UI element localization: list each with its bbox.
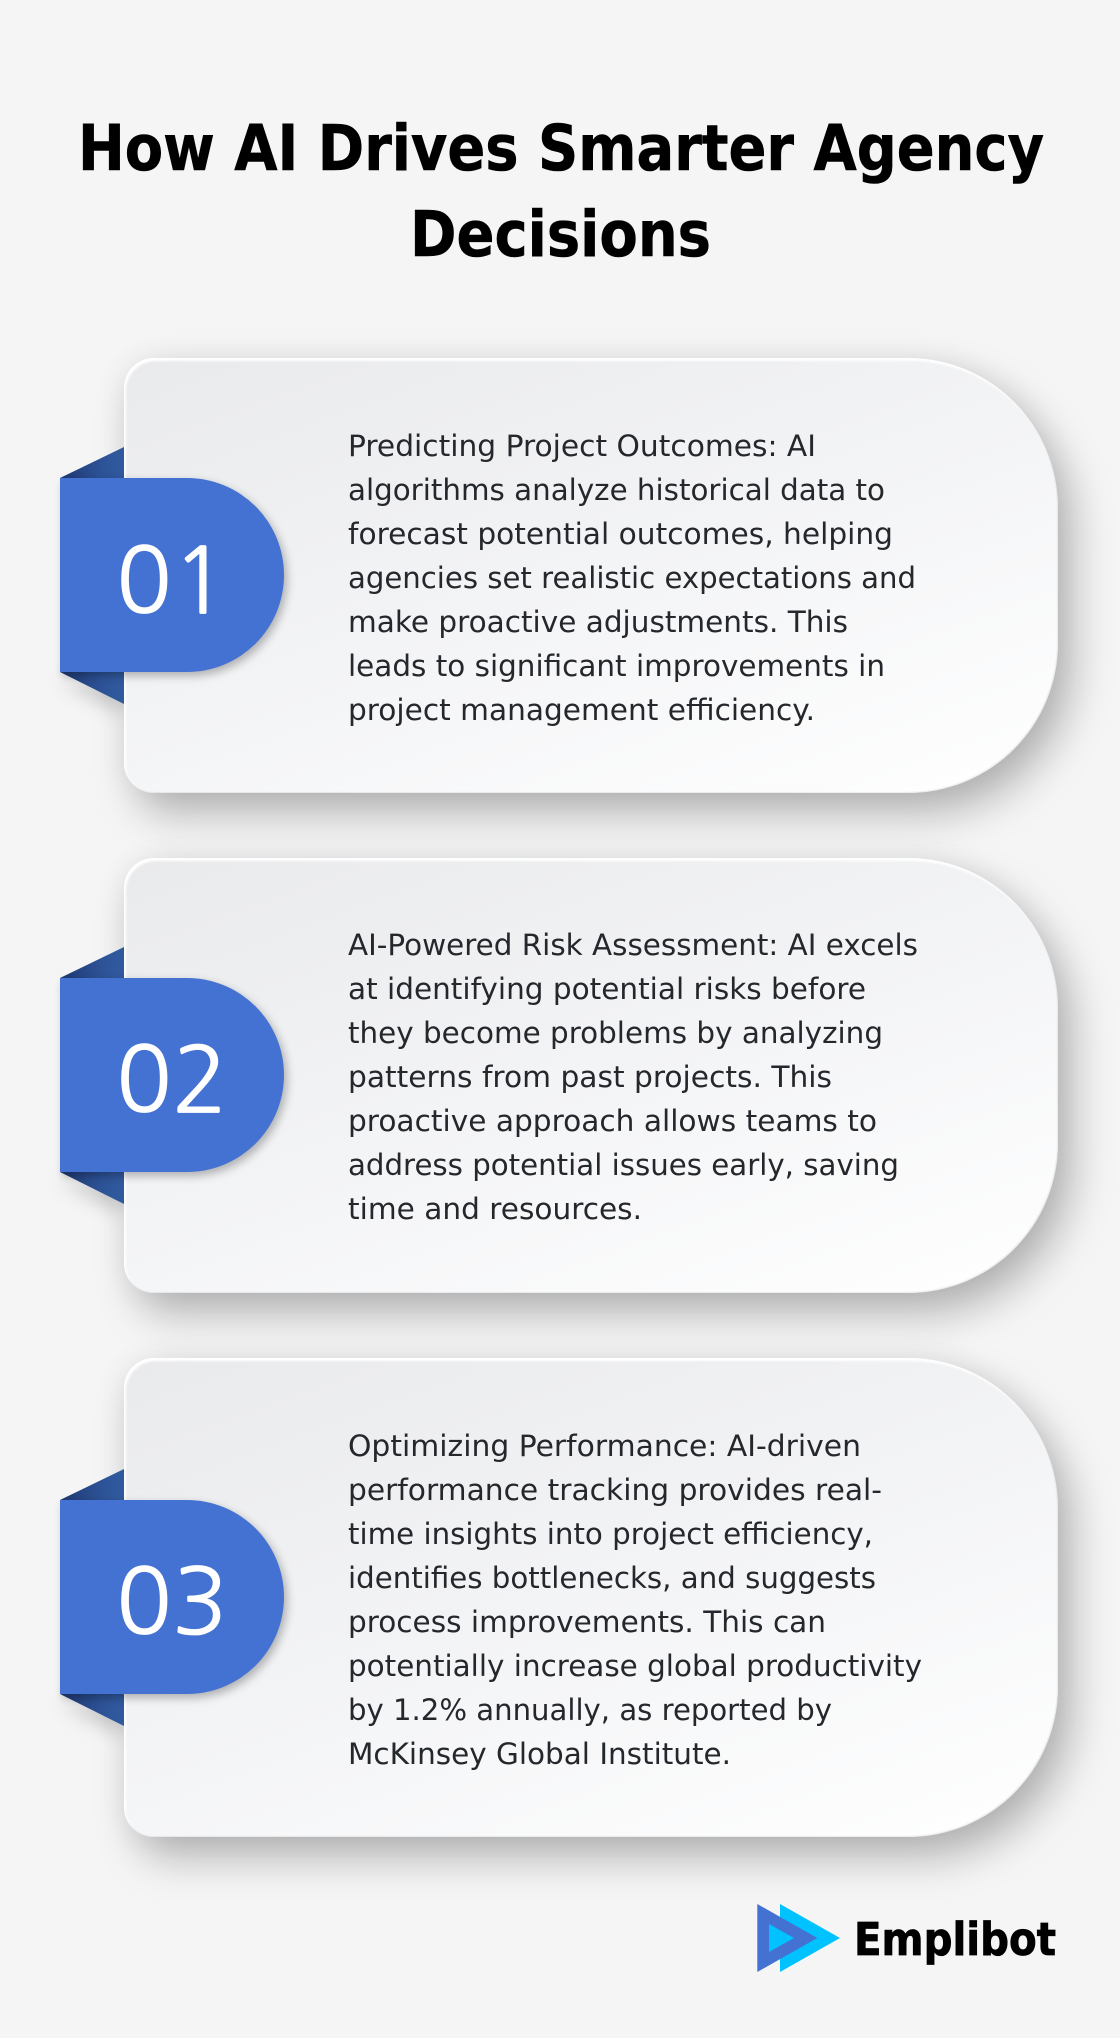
wordmark: Emplibot (854, 1913, 1056, 1966)
panel: 03 optimizing performance (58, 1350, 1095, 1880)
description text: at identifying potential risks before (348, 972, 866, 1006)
number badge (60, 1500, 284, 1694)
number badge (60, 478, 284, 672)
description text: project management efficiency. (348, 693, 815, 727)
description text: potentially increase global productivity (348, 1649, 922, 1683)
description text: leads to significant improvements in (348, 649, 885, 683)
description text: AI-Powered Risk Assessment: AI excels (348, 928, 918, 962)
description text (348, 928, 918, 1226)
number badge (60, 978, 284, 1172)
title: Decisions (410, 198, 711, 271)
ribbon folds (60, 1469, 124, 1738)
title (78, 112, 1044, 271)
description text: address potential issues early, saving (348, 1148, 899, 1182)
description text: identifies bottlenecks, and suggests (348, 1561, 876, 1595)
description text: time and resources. (348, 1192, 642, 1226)
description text: by 1.2% annually, as reported by (348, 1693, 832, 1727)
logo: Emplibot (757, 1904, 1056, 1972)
description text (348, 429, 916, 727)
number badge: 01 (116, 536, 228, 627)
card body (124, 358, 1058, 793)
panel: 01 predicting project outcomes (58, 350, 1095, 836)
description text: proactive approach allows teams to (348, 1104, 877, 1138)
description text: Predicting Project Outcomes: AI (348, 429, 816, 463)
number badge: 02 (116, 1035, 228, 1126)
ribbon folds (60, 447, 124, 716)
description text: performance tracking provides real- (348, 1473, 882, 1507)
description text: patterns from past projects. This (348, 1060, 832, 1094)
description text: forecast potential outcomes, helping (348, 517, 893, 551)
description text: agencies set realistic expectations and (348, 561, 916, 595)
description text (348, 1429, 922, 1771)
card body (124, 1358, 1058, 1837)
description text: make proactive adjustments. This (348, 605, 848, 639)
icon: play triangles (757, 1904, 840, 1972)
panel: 02 risk assessment (58, 850, 1095, 1336)
number badge: 03 (116, 1557, 228, 1648)
description text: Optimizing Performance: AI-driven (348, 1429, 861, 1463)
card body (124, 858, 1058, 1293)
description text: McKinsey Global Institute. (348, 1737, 731, 1771)
description text: time insights into project efficiency, (348, 1517, 873, 1551)
description text: algorithms analyze historical data to (348, 473, 885, 507)
ribbon folds (60, 947, 124, 1216)
description text: process improvements. This can (348, 1605, 826, 1639)
description text: they become problems by analyzing (348, 1016, 883, 1050)
